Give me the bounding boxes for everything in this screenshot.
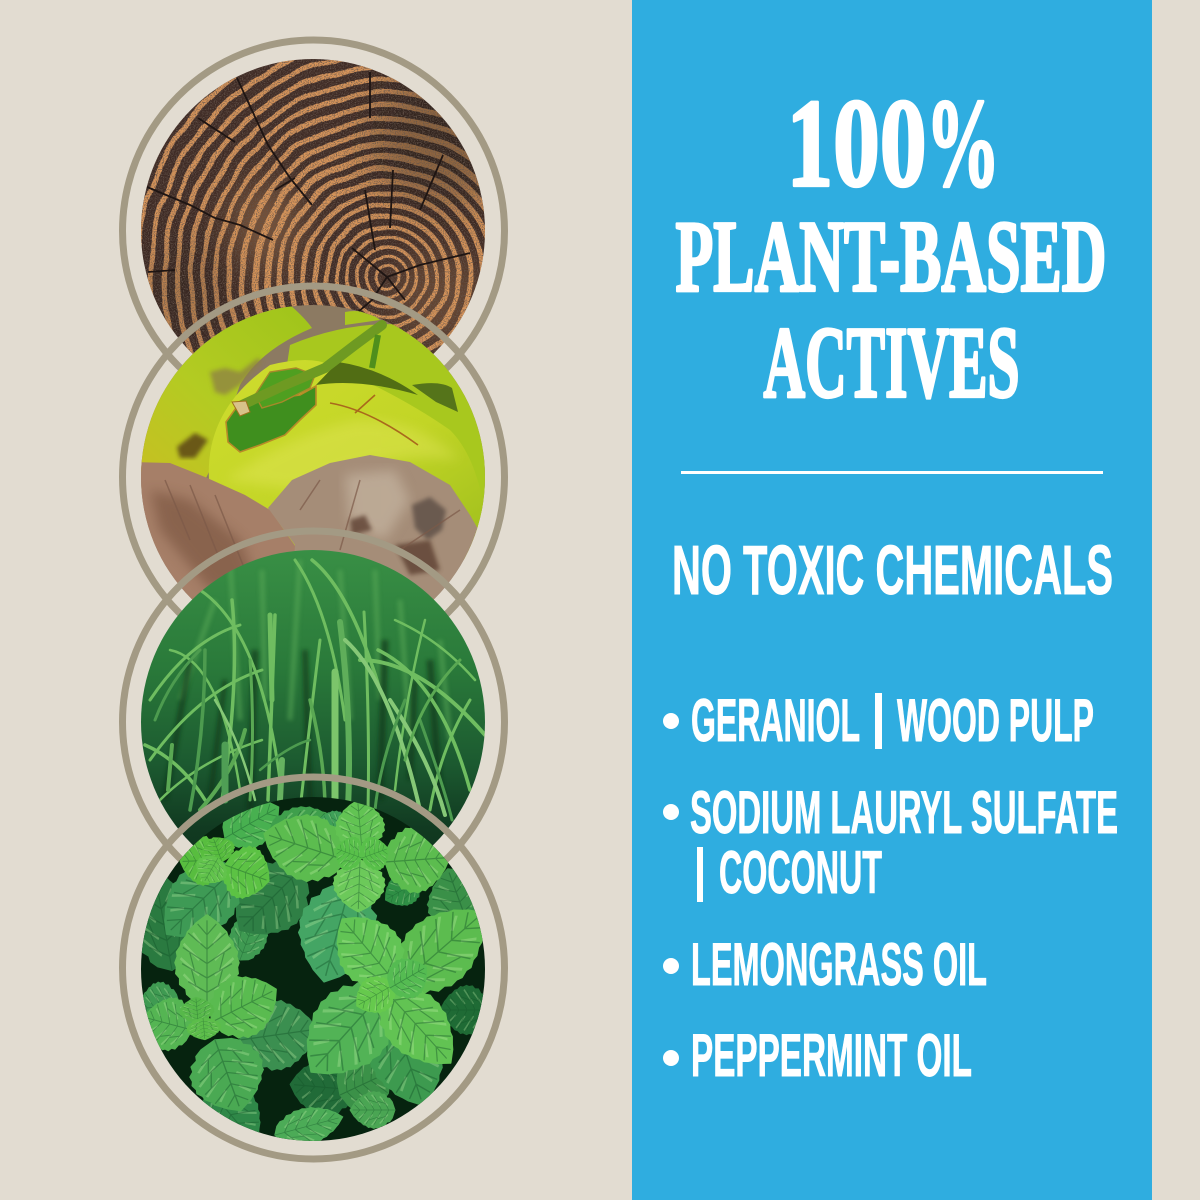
photo: mint leaves <box>141 797 485 1141</box>
heading: 100% plant-based actives: % <box>926 74 1000 214</box>
coconut husks <box>141 455 478 600</box>
ring: peppermint <box>122 777 504 1159</box>
list item: geraniol: GERANIOL <box>691 687 860 754</box>
list item: peppermint oil <box>663 1022 972 1089</box>
list item: lemongrass oil <box>663 931 987 998</box>
photo: coconuts <box>141 305 485 600</box>
ring: wood <box>122 40 504 422</box>
photo: lemongrass blades <box>141 550 485 846</box>
heading: 100% plant-based actives: 100 <box>786 74 926 214</box>
circle: coconut <box>119 282 508 616</box>
panel: blue <box>632 0 1152 1200</box>
circle: wood <box>119 36 508 371</box>
list item: peppermint oil: PEPPERMINT OIL <box>691 1022 972 1089</box>
list item: sodium lauryl sulfate <box>663 779 1118 906</box>
circle: peppermint <box>122 777 506 1162</box>
heading: 100% plant-based actives <box>676 74 1106 420</box>
list item: sodium lauryl sulfate: COCONUT <box>719 839 882 906</box>
ring: coconut <box>122 286 504 668</box>
ring: lemongrass <box>122 531 504 913</box>
photo: wood rings <box>141 59 485 354</box>
circle: lemongrass <box>119 528 508 862</box>
